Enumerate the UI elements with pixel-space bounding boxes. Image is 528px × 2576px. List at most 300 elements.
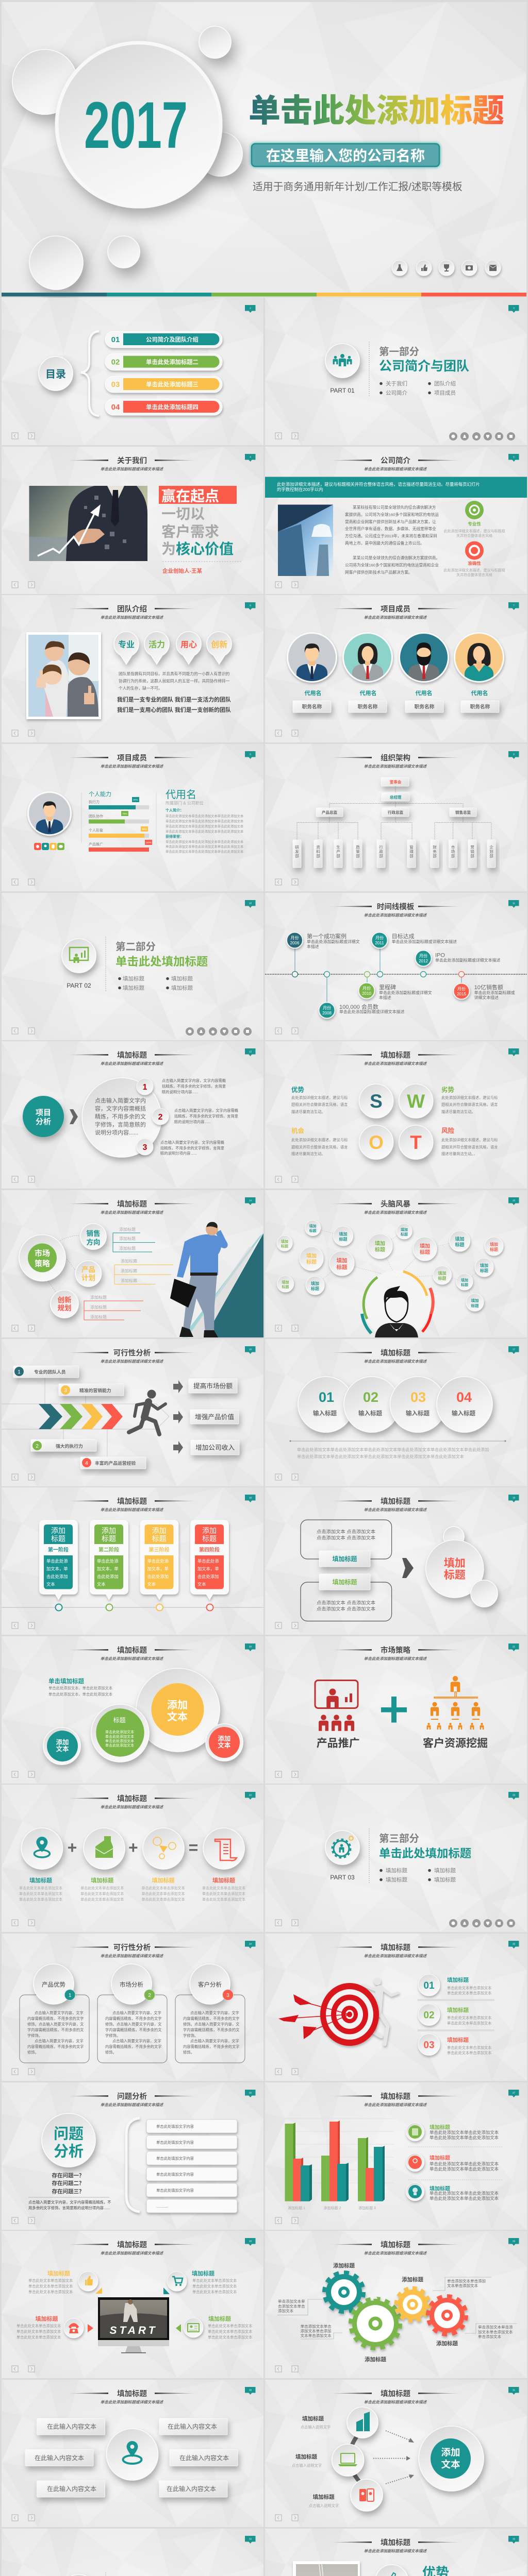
slide 31: three icons to circle xyxy=(265,2380,527,2527)
chevron xyxy=(402,1558,414,1578)
header xyxy=(364,1646,427,1661)
column text: 单击此处文本单击添加文本 xyxy=(202,1886,245,1890)
callout text: 文本单击添加文本 xyxy=(447,2283,478,2288)
card 3: 客户分析 xyxy=(198,1981,222,1988)
page tag: 5 xyxy=(513,455,515,459)
column text: 单击此处文本单击添加文本 xyxy=(141,1886,185,1890)
page tag xyxy=(245,2387,256,2395)
idea bubbles: 填加 xyxy=(438,1270,447,1276)
milestone 2010: 单击此处添加副标题或详细文 xyxy=(379,990,432,995)
skill bars: 95% xyxy=(142,828,147,831)
header xyxy=(364,2538,427,2553)
header: 单击此处添加副标题或详细文本描述 xyxy=(364,1359,427,1364)
milestone 2012: 月份 xyxy=(419,953,427,958)
circle 03: 输入标题 xyxy=(406,1410,430,1417)
card 4: 添加 xyxy=(202,1527,217,1535)
legend item 1: 单击此处添加文本单击此处添加文本 xyxy=(430,2130,499,2135)
column text: 填加标题 xyxy=(152,1876,174,1884)
body text: 某某科技有限公司是全球领先的综合通信解决方 xyxy=(353,505,436,510)
bullet list: 填加标题 xyxy=(171,985,193,991)
item 03: 单击此处文本单击添加文本 xyxy=(447,2045,491,2050)
branch: 销售方向: 添加标题 xyxy=(119,1236,136,1241)
milestone 2012: 2012 xyxy=(419,959,428,963)
slide 10: 第二部分 section xyxy=(2,893,263,1040)
milestone 2011: 2011 xyxy=(375,941,384,945)
branch: 销售方向: 添加标题 xyxy=(119,1227,136,1232)
card 2 xyxy=(97,1964,167,2063)
text: bottom right xyxy=(208,2315,252,2340)
优势 xyxy=(291,1086,348,1114)
card 3: 添加 xyxy=(152,1527,166,1535)
text: top right: 单击此处文本单击添加文本 xyxy=(192,2278,237,2283)
header: 填加标题 xyxy=(381,2092,410,2101)
lower box xyxy=(301,1582,392,1621)
page tag: 17 xyxy=(513,1348,515,1351)
job title tags: 职务名称 xyxy=(358,703,378,710)
milestone 2011: 月份 xyxy=(375,935,384,940)
profile text: 单击此处添加文本单击此处添加文本单击此处添加文本 xyxy=(166,849,244,854)
slide 27: bar chart xyxy=(265,2082,527,2230)
number badges xyxy=(137,1078,169,1155)
header: 填加标题 xyxy=(117,1497,147,1506)
idea bubbles: 标题 xyxy=(281,1244,288,1248)
operators: = xyxy=(189,1838,198,1857)
slide 23: 第三部分 section xyxy=(265,1785,527,1932)
header: 单击此处添加副标题或详细文本描述 xyxy=(101,467,164,471)
businessman walking with briefcase xyxy=(170,1222,225,1337)
page tag: 19 xyxy=(513,1496,515,1499)
legend item 1: 填加标题 xyxy=(430,2124,450,2131)
text: bottom right: 填加标题 xyxy=(208,2315,231,2323)
divider xyxy=(105,937,106,991)
slide 28: monitor xyxy=(2,2231,263,2378)
feature: 专业性: 此处添加详细文本描述，建议与标题相 xyxy=(443,529,505,533)
item 02: 02 xyxy=(423,2010,435,2021)
idea bubbles: 填加 xyxy=(282,1280,289,1284)
red circle xyxy=(206,1724,243,1761)
callout text: 添加文本 xyxy=(278,2308,293,2313)
milestone 2008 xyxy=(319,1003,404,1018)
six labels: 在此输入内容文本 xyxy=(167,2485,216,2493)
big circle: 填加 xyxy=(444,1557,466,1569)
card 2: 点击输入简要文字内容，文字 xyxy=(112,2011,161,2015)
item 02: 单击此处文本单击添加文本 xyxy=(447,2021,491,2026)
callout text: 加文本单击添加文本 xyxy=(478,2329,513,2334)
yellow circle xyxy=(136,1668,220,1752)
card 3: 内容需概括精炼，不用多余的文字 xyxy=(183,2044,239,2049)
card 1: 点击输入简要文字内容，文字 xyxy=(35,2011,84,2015)
idea bubbles: 填加 xyxy=(455,1236,465,1242)
question list: 存在问题三？ xyxy=(52,2188,85,2195)
social icons xyxy=(34,843,64,850)
idea bubbles: 标题 xyxy=(336,1264,348,1270)
lower box: 点击添加文本 点击添加文本 xyxy=(317,1600,375,1605)
big circle: 标题 xyxy=(444,1569,466,1581)
column text: 单击此处文本单击添加文本 xyxy=(202,1897,245,1902)
text: bottom right: 单击此处文本单击添加文本 xyxy=(208,2335,252,2340)
yellow circle: 添加 xyxy=(167,1699,188,1711)
milestone 2008: 月份 xyxy=(323,1005,331,1010)
dashed connectors xyxy=(48,1235,81,1296)
page tag xyxy=(508,751,519,759)
header: 填加标题 xyxy=(117,1050,147,1060)
strategy circle: 市场 xyxy=(35,1249,50,1258)
description: 单击此处添加文本单击此处添加文本单击此处添加文本单击此处添加文本单击此处添加文本 xyxy=(297,1454,464,1459)
page tag: 30 xyxy=(249,2388,252,2392)
header xyxy=(364,2240,427,2256)
milestone 2006: 本描述 xyxy=(307,944,319,949)
item text 2 xyxy=(174,1108,238,1124)
header: 填加标题 xyxy=(117,1199,147,1209)
item 04: 04 xyxy=(111,403,120,412)
gear person icon xyxy=(325,1831,359,1865)
callout text: 单击添加文本 xyxy=(478,2334,501,2339)
item 01: 公司简介及团队介绍 xyxy=(146,336,199,343)
body text: 两地上市，是中国最大的通信设备上市公司。 xyxy=(345,540,424,546)
slide 22: equation of icons xyxy=(2,1785,263,1932)
card 1: 击此处添加 xyxy=(46,1574,68,1579)
operators: + xyxy=(128,1838,138,1857)
page tag xyxy=(508,1643,519,1651)
body text: 营商和企业网客户提供创新技术与产品解决方案，让 xyxy=(345,519,436,524)
slide 8: 项目成员 profile xyxy=(2,744,263,891)
text: top left: 填加标题 xyxy=(47,2270,70,2277)
page tag: 29 xyxy=(513,2240,515,2242)
milestone 2010: 2010 xyxy=(362,991,371,996)
teal shapes behind figure xyxy=(182,1233,263,1337)
page tag xyxy=(508,454,519,462)
strategy circle: 策略 xyxy=(35,1259,50,1268)
card 3: 3 xyxy=(226,1993,229,1998)
header xyxy=(101,2240,164,2256)
column text: 单击此处文本单击添加文本 xyxy=(202,1891,245,1896)
gear labels: 添加标题 xyxy=(402,2276,423,2283)
decorative circle: bottom middle xyxy=(108,236,140,268)
company name button xyxy=(252,144,439,166)
card 3: 字修饰。 xyxy=(183,2033,198,2038)
idea bubbles: 填加 xyxy=(490,1242,498,1247)
3D bar chart xyxy=(285,2119,394,2201)
lower box: 点击添加文本 点击添加文本 xyxy=(317,1606,375,1612)
劣势: 描述尽量简洁生动。 xyxy=(441,1109,475,1114)
branch: 产品计划: 计划 xyxy=(81,1274,95,1282)
card 1: 加文本，单 xyxy=(46,1566,68,1571)
page tag xyxy=(508,2536,519,2544)
job title tags xyxy=(293,701,499,713)
slide 32: 第四部分 section xyxy=(2,2529,263,2576)
idea bubbles: 填加 xyxy=(306,1252,317,1259)
circle: scroll icon xyxy=(203,1828,244,1869)
text: top right: 单击此处文本单击添加文本 xyxy=(192,2284,237,2289)
timeline axis xyxy=(265,974,527,975)
card 2: 市场分析 xyxy=(120,1981,143,1988)
card 3: 字内容需概括精炼，不用多余的文 xyxy=(183,2027,240,2032)
page tag xyxy=(508,305,519,313)
header xyxy=(101,1943,164,1958)
card 1: 点击输入简要文字内容，文字 xyxy=(35,2039,84,2043)
header: 项目成员 xyxy=(381,604,410,614)
callout text: 单击添加文本单击添加 xyxy=(447,2278,486,2283)
team icon xyxy=(325,344,359,378)
column text: 单击此处文本单击添加文本 xyxy=(80,1897,124,1902)
avatar 2 xyxy=(343,633,392,683)
header: 单击此处添加副标题或详细文本描述 xyxy=(101,1359,164,1364)
slide 3: 第一部分 section xyxy=(265,298,527,445)
header: 填加标题 xyxy=(381,1050,410,1060)
card 1: 修饰。 xyxy=(27,2050,39,2055)
question circle xyxy=(42,2113,95,2167)
page tag: 16 xyxy=(249,1348,252,1351)
milestone 2010 xyxy=(359,983,432,1000)
column text: 单击此处文本单击添加文本 xyxy=(19,1897,62,1902)
item 04: 单击此处添加标题四 xyxy=(146,403,199,411)
card 2: 2 xyxy=(148,1993,151,1998)
page tag: 14 xyxy=(249,1199,252,1201)
header: 单击此处添加副标题或详细文本描述 xyxy=(101,1210,164,1215)
callout text xyxy=(278,2278,513,2339)
header: 单击此处添加副标题或详细文本描述 xyxy=(364,1656,427,1661)
branch: 产品计划: 添加标题 xyxy=(121,1278,137,1283)
card 1: 第一阶段 xyxy=(48,1547,69,1553)
answer boxes: 单击此处填加文字内容 xyxy=(156,2172,194,2177)
callout text: 文本单击添加文本 xyxy=(301,2333,332,2338)
text 3: 点击输入说明文字 xyxy=(309,2503,339,2508)
item 03: 单击此处文本单击添加文本 xyxy=(447,2050,491,2055)
icon: phones xyxy=(351,2479,383,2511)
top small circle xyxy=(443,1527,464,1547)
card 2: 字修饰。 xyxy=(105,2033,120,2038)
header: 单击此处添加副标题或详细文本描述 xyxy=(101,2400,164,2404)
legend item 1 xyxy=(406,2123,499,2141)
slogan xyxy=(159,486,237,557)
page tag xyxy=(245,2090,256,2097)
profile text: 单击此处添加文本单击此处添加文本单击此处添加文本 xyxy=(166,814,244,818)
legend item 3 xyxy=(406,2182,499,2201)
page tag xyxy=(508,2090,519,2097)
circle 01: 01 xyxy=(319,1389,334,1405)
callout lines xyxy=(277,2277,517,2339)
circle 02: 输入标题 xyxy=(358,1410,382,1417)
slide 26: 问题分析 xyxy=(2,2082,263,2230)
page tag: 8 xyxy=(250,753,251,755)
question list: 存在问题一？ xyxy=(52,2172,85,2179)
item 02: 单击此处文本单击添加文本 xyxy=(447,2015,491,2020)
item text 3: 赅的说明分项内容...... xyxy=(160,1151,197,1156)
slide 11: 时间线模板 xyxy=(265,893,527,1040)
icon: laptop xyxy=(332,2444,364,2476)
legend item 2: 填加标题 xyxy=(430,2155,450,2161)
org chart lines xyxy=(297,786,491,840)
bullet list: 填加标题 xyxy=(171,975,193,982)
item 04 xyxy=(105,399,222,415)
thumbs up xyxy=(375,2565,408,2576)
profile text xyxy=(166,789,244,854)
page tag: 31 xyxy=(513,2388,515,2392)
bullet list: 填加标题 xyxy=(123,985,144,991)
body text: 全世界用户享有语音、数据、多媒体、无线宽带等全 xyxy=(345,526,436,531)
gear: yellow xyxy=(396,2288,429,2321)
milestone 2015: 2015 xyxy=(457,992,466,996)
description: 单击此处添加文本单击此处添加文本单击此处添加文本单击此处添加文本单击此处添加文本单击此处添加 xyxy=(297,1447,489,1452)
card 3: 修饰。 xyxy=(183,2050,194,2055)
SWOT circles: O xyxy=(369,1132,384,1153)
description: 点击输入简要文字内容，文字内容需概括精炼，不 xyxy=(28,2200,111,2205)
header xyxy=(101,1794,164,1809)
idea bubbles: 标题 xyxy=(471,1303,479,1308)
milestone 2011 xyxy=(371,933,457,948)
idea bubbles: 标题 xyxy=(309,1228,317,1233)
header: 单击此处添加副标题或详细文本描述 xyxy=(364,1210,427,1215)
card 1: 产品优势 xyxy=(42,1981,65,1988)
text: bottom left: 单击此处文本单击添加文本 xyxy=(16,2324,61,2328)
body text: 案提供商。公司将为全球160多个国家和地区的电信运 xyxy=(345,512,439,517)
milestone 2010: 本描述 xyxy=(379,995,391,1000)
number badges: 2 xyxy=(158,1113,163,1122)
feature: 准确性: 此处添加详细文本描述，建议与标题相 xyxy=(443,568,505,572)
item text 3: 括精炼，不用多余的文字修饰，言简意 xyxy=(160,1146,224,1150)
job title tags: 职务名称 xyxy=(415,703,435,710)
text: top right: 单击此处文本单击添加文本 xyxy=(192,2290,237,2294)
label 4: 4 xyxy=(85,1461,88,1466)
header: 填加标题 xyxy=(117,2240,147,2249)
text: bottom left: 填加标题 xyxy=(35,2315,58,2323)
card 2: 修饰。 xyxy=(105,2050,117,2055)
page tag xyxy=(508,1346,519,1354)
skill bars: 87% xyxy=(133,799,138,801)
card 3: 修饰。点击输入简要文字内容，文 xyxy=(183,2022,240,2027)
profile text: 单击此处添加文本单击此处添加文本单击此处添加文本 xyxy=(166,839,244,844)
header xyxy=(101,1497,164,1512)
card 3: 单击此处添 xyxy=(147,1558,169,1564)
slide 13: SWOT xyxy=(265,1041,527,1189)
item 03: 单击此处添加标题三 xyxy=(146,381,199,388)
part label: PART 01 xyxy=(330,387,355,394)
column text: 单击此处文本单击添加文本 xyxy=(141,1891,185,1896)
header: 项目成员 xyxy=(117,753,147,762)
milestone 2012: 单击此处添加副标题或详细文本描述 xyxy=(435,957,500,962)
growth icon xyxy=(62,2574,96,2576)
card 4: 文本 xyxy=(197,1582,206,1587)
green circle xyxy=(91,1704,149,1762)
circle 02: 02 xyxy=(363,1389,378,1405)
circle 02 xyxy=(344,1377,400,1432)
six labels: 在此输入内容文本 xyxy=(47,2422,96,2430)
coloured ring around person xyxy=(362,1270,433,1338)
header: 填加标题 xyxy=(381,2538,410,2547)
idea bubbles: 填加 xyxy=(281,1239,288,1244)
idea bubbles: 填加 xyxy=(311,1281,319,1286)
column text: 单击此处文本单击添加文本 xyxy=(141,1897,185,1902)
branch: 创新规划: 添加标题 xyxy=(90,1314,107,1319)
pins xyxy=(114,632,232,664)
header xyxy=(364,1199,427,1215)
profile text: 单击此处添加文本单击此处添加文本单击此处添加文本 xyxy=(166,844,244,849)
text: top right: 填加标题 xyxy=(192,2270,214,2277)
description: 协调行为的系统，这群人就如同人的五官一样，共同协作缔持一 xyxy=(119,678,230,683)
header xyxy=(101,1646,164,1661)
劣势: 题相关并符合整体语言风格，语言 xyxy=(441,1103,498,1107)
names: 代用名 xyxy=(471,689,488,697)
callout text: 单击添加文本单击 xyxy=(301,2324,332,2329)
legend item 2 xyxy=(406,2154,499,2172)
branch: 销售方向: 销售 xyxy=(87,1229,100,1238)
机会 xyxy=(291,1127,348,1156)
page tag: 28 xyxy=(249,2240,252,2242)
page tag: 21 xyxy=(513,1646,515,1648)
top boxes: 总经理 xyxy=(390,794,402,800)
dividers xyxy=(81,792,156,843)
bottom small circle xyxy=(471,1580,498,1607)
section title: 单击此处填加标题 xyxy=(379,1847,471,1860)
idea bubbles: 标题 xyxy=(311,1286,319,1291)
six labels: 在此输入内容文本 xyxy=(179,2454,229,2462)
风险: 题相关并符合整体语言风格，语言 xyxy=(441,1145,498,1149)
customer org icon xyxy=(427,1676,484,1730)
page tag xyxy=(508,1792,519,1800)
text: bottom left xyxy=(16,2315,61,2340)
icon: phone xyxy=(64,2318,84,2338)
teal banner: 此处添加详细文本描述，建议与标题相关并符合整体语言风格，语言描述尽量简洁生动。尽量将每页幻灯片 xyxy=(277,482,480,487)
card 1 xyxy=(39,1520,78,1611)
header: 单击此处添加副标题或详细文本描述 xyxy=(364,1061,427,1066)
guide lines xyxy=(2,1378,169,1457)
card 3: 第三阶段 xyxy=(148,1547,169,1553)
item text 1: 点击输入简要文字内容，文字内容需概 xyxy=(162,1078,226,1083)
header xyxy=(364,902,427,918)
idea bubbles: 标题 xyxy=(282,1284,289,1289)
directors xyxy=(316,808,476,817)
column text: 单击此处文本单击添加文本 xyxy=(80,1891,124,1896)
milestone 2008: 2008 xyxy=(322,1011,332,1015)
header xyxy=(101,2092,164,2107)
legend item 1: 单击此处添加文本单击此处添加文本 xyxy=(430,2135,499,2140)
label 2: 填加标题 xyxy=(332,1578,357,1586)
callout text: 添加文本单击添加 xyxy=(301,2328,332,2333)
running figure xyxy=(129,1390,166,1434)
label 1: 填加标题 xyxy=(332,1555,357,1563)
milestone 2006: 2006 xyxy=(290,941,300,945)
page tag xyxy=(245,751,256,759)
item text 1: 括精炼，不用多余的文字修饰，言简意 xyxy=(162,1084,226,1089)
text: top left: 单击此处文本单击添加文本 xyxy=(28,2278,73,2283)
upper box xyxy=(301,1520,392,1559)
text 3: 填加标题 xyxy=(313,2494,335,2500)
branch: 创新规划: 创新 xyxy=(58,1296,72,1304)
answer boxes: 单击此处填加文字内容 xyxy=(156,2124,194,2129)
card 4: 第四阶段 xyxy=(199,1547,220,1553)
yellow circle: 文本 xyxy=(167,1710,188,1723)
teal circle: 分析 xyxy=(36,1117,51,1126)
six labels: 在此输入内容文本 xyxy=(168,2422,217,2430)
legend divider xyxy=(408,2147,502,2180)
item 03: 03 xyxy=(111,380,120,389)
bullet list: 填加标题 xyxy=(123,975,144,982)
bubble connectors xyxy=(312,1228,484,1302)
main circle: 说明分项内容...... xyxy=(95,1129,138,1136)
number badges: 3 xyxy=(143,1143,147,1152)
red circle: 文本 xyxy=(218,1741,231,1749)
card 2: 添加 xyxy=(102,1527,116,1535)
description: 团队是指拥有共同目标，并且具有不同能力的一小群人有意识的 xyxy=(119,671,230,676)
card 4 xyxy=(190,1520,229,1611)
product promotion icon xyxy=(315,1681,358,1731)
slide 5: 公司简介 xyxy=(265,447,527,594)
pins: 创新 xyxy=(211,640,227,650)
person silhouette xyxy=(375,1286,418,1337)
strategy circle xyxy=(19,1234,65,1281)
gear labels: 添加标题 xyxy=(333,2262,355,2269)
header xyxy=(364,1050,427,1066)
